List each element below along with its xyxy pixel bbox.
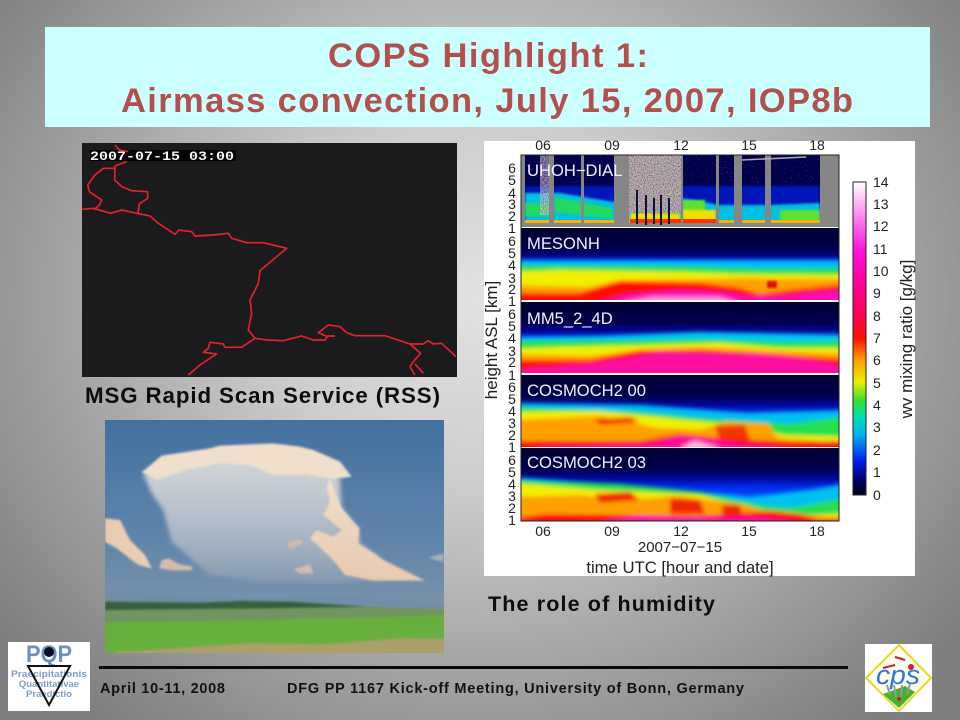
bottom axis ticks bbox=[535, 523, 825, 539]
panel labels: MM5_2_4D bbox=[527, 309, 613, 328]
colour bar ticks: 4 bbox=[873, 397, 881, 413]
bottom axis ticks: 09 bbox=[604, 523, 620, 539]
height axis ticks bbox=[508, 160, 516, 528]
bottom axis ticks: 06 bbox=[535, 523, 551, 539]
height axis ticks: 4 bbox=[508, 403, 516, 419]
height axis ticks: 1 bbox=[508, 512, 516, 528]
logo: PQP: Praedictio bbox=[26, 689, 72, 700]
panel: COSMOCH2 00 bbox=[522, 375, 838, 447]
colour bar ticks: 8 bbox=[873, 308, 881, 324]
height axis ticks: 3 bbox=[508, 270, 516, 286]
colour bar ticks: 11 bbox=[873, 241, 888, 257]
panel: UHOH-DIAL bbox=[521, 155, 839, 227]
colour bar title: wv mixing ratio [g/kg] bbox=[897, 260, 916, 419]
y axis title: height ASL [km] bbox=[482, 281, 501, 399]
colour bar ticks: 14 bbox=[873, 174, 889, 190]
footer date: April 10-11, 2008 bbox=[100, 681, 225, 697]
caption: humidity: The role of humidity bbox=[488, 592, 715, 616]
logo: COPS bbox=[865, 644, 932, 712]
top axis ticks: 06 bbox=[535, 137, 551, 153]
height axis ticks: 6 bbox=[508, 452, 516, 468]
height axis ticks: 3 bbox=[508, 196, 516, 212]
colour bar ticks: 1 bbox=[873, 464, 881, 480]
map timestamp: 2007-07-15 03:00 bbox=[90, 149, 234, 164]
chart frame bbox=[521, 155, 839, 521]
height axis ticks: 1 bbox=[508, 220, 516, 236]
footer meeting: DFG PP 1167 Kick-off Meeting, University of Bonn, Germany bbox=[287, 681, 744, 697]
colour bar ticks: 3 bbox=[873, 419, 881, 435]
top axis ticks: 15 bbox=[741, 137, 757, 153]
height axis ticks: 1 bbox=[508, 439, 516, 455]
height axis ticks: 5 bbox=[508, 245, 516, 261]
panel: COSMOCH2 03 bbox=[522, 448, 838, 520]
x axis date: 2007−07−15 bbox=[638, 539, 722, 556]
title line 1: COPS Highlight 1: bbox=[328, 37, 648, 75]
height axis ticks: 4 bbox=[508, 257, 516, 273]
small cloud centre bbox=[159, 558, 193, 570]
height axis ticks: 1 bbox=[508, 367, 516, 383]
logo: PQP: Praecipitationis bbox=[11, 669, 87, 680]
colour bar ticks: 6 bbox=[873, 352, 881, 368]
distant haze bbox=[105, 592, 445, 612]
height axis ticks: 1 bbox=[508, 293, 516, 309]
colour bar ticks: 13 bbox=[873, 196, 889, 212]
colour bar ticks: 5 bbox=[873, 375, 881, 391]
colour bar ticks: 9 bbox=[873, 285, 881, 301]
height axis ticks: 6 bbox=[508, 306, 516, 322]
height axis ticks: 3 bbox=[508, 343, 516, 359]
height axis ticks: 4 bbox=[508, 476, 516, 492]
treeline bbox=[105, 601, 367, 610]
colour bar bbox=[853, 182, 866, 495]
height axis ticks: 4 bbox=[508, 330, 516, 346]
footer rule bbox=[99, 666, 848, 669]
small cloud left bbox=[105, 518, 152, 568]
logo: COPS: cps bbox=[876, 660, 920, 690]
sunlit cloud flank bbox=[310, 478, 425, 581]
height axis ticks: 5 bbox=[508, 464, 516, 480]
bottom axis ticks: 12 bbox=[673, 523, 689, 539]
top axis ticks: 18 bbox=[809, 137, 825, 153]
x axis title: time UTC [hour and date] bbox=[586, 558, 774, 577]
height axis ticks: 5 bbox=[508, 318, 516, 334]
title line 2: Airmass convection, July 15, 2007, IOP8b bbox=[121, 82, 853, 120]
height axis ticks: 2 bbox=[508, 427, 516, 443]
height axis ticks: 5 bbox=[508, 391, 516, 407]
sunlit anvil top bbox=[142, 443, 352, 480]
height axis ticks: 3 bbox=[508, 415, 516, 431]
logo: PQP: Quantitativae bbox=[19, 679, 79, 690]
panel labels: UHOH−DIAL bbox=[527, 161, 622, 180]
map border lines bbox=[82, 145, 456, 375]
top axis ticks: 12 bbox=[673, 137, 689, 153]
height axis ticks: 2 bbox=[508, 354, 516, 370]
colour bar ticks: 10 bbox=[873, 263, 889, 279]
colour bar ticks: 12 bbox=[873, 218, 889, 234]
top axis ticks: 09 bbox=[604, 137, 620, 153]
anvil cloud body bbox=[141, 462, 382, 584]
height axis ticks: 2 bbox=[508, 281, 516, 297]
cloud photograph bbox=[105, 420, 445, 655]
dry foreground bbox=[117, 638, 445, 655]
title banner bbox=[45, 27, 930, 127]
height axis ticks: 6 bbox=[508, 160, 516, 176]
panel labels: COSMOCH2 00 bbox=[527, 381, 646, 400]
height axis ticks: 3 bbox=[508, 488, 516, 504]
panel labels: COSMOCH2 03 bbox=[527, 453, 646, 472]
height axis ticks: 4 bbox=[508, 185, 516, 201]
logo: PQP bbox=[8, 641, 90, 711]
grass bbox=[105, 607, 445, 653]
panel: MESONH bbox=[522, 228, 838, 300]
caption: MSG: MSG Rapid Scan Service (RSS) bbox=[85, 383, 440, 408]
panel labels bbox=[527, 161, 646, 472]
height axis ticks: 2 bbox=[508, 500, 516, 516]
humidity chart bbox=[482, 137, 916, 577]
satellite map panel bbox=[82, 143, 457, 377]
colour bar ticks: 0 bbox=[873, 487, 881, 503]
colour bar ticks: 7 bbox=[873, 330, 881, 346]
panel labels: MESONH bbox=[527, 234, 600, 253]
height axis ticks: 5 bbox=[508, 172, 516, 188]
top axis ticks bbox=[535, 137, 825, 153]
height axis ticks: 6 bbox=[508, 233, 516, 249]
colour bar ticks: 2 bbox=[873, 442, 881, 458]
height axis ticks: 6 bbox=[508, 379, 516, 395]
height axis ticks: 2 bbox=[508, 208, 516, 224]
colour bar ticks bbox=[873, 174, 889, 503]
panel: MM5_2_4D bbox=[522, 302, 838, 373]
bottom axis ticks: 15 bbox=[741, 523, 757, 539]
data gaps bbox=[521, 155, 839, 227]
bottom axis ticks: 18 bbox=[809, 523, 825, 539]
logo: PQP: PQP bbox=[26, 641, 72, 668]
